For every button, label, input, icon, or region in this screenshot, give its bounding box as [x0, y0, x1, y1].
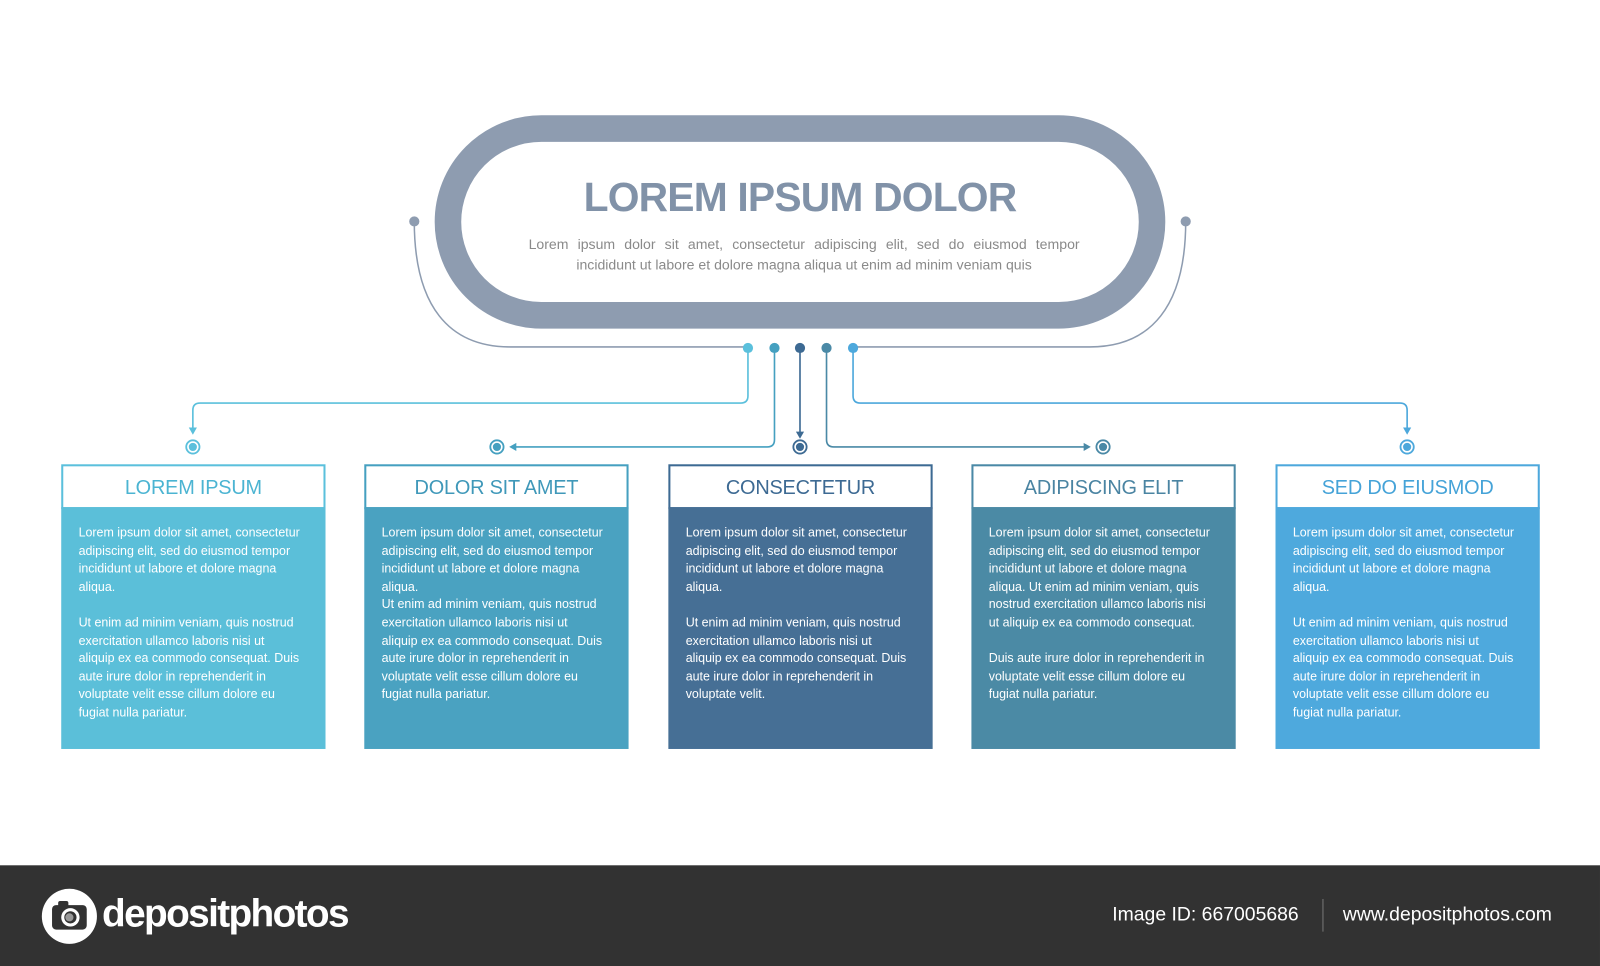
- card 2 body: [364, 507, 629, 749]
- card 5 body: Lorem ipsum dolor sit amet, consectetur: [1293, 526, 1514, 540]
- card 3 body: Ut enim ad minim veniam, quis nostrud: [686, 615, 901, 630]
- card 1 body: aliquip ex ea commodo consequat. Duis: [79, 651, 299, 665]
- card 4 heading: [971, 464, 1236, 509]
- card 3 body: aliquip ex ea commodo consequat. Duis: [686, 651, 906, 665]
- card 3 body: aute irure dolor in reprehenderit in: [686, 669, 873, 683]
- card 5 body: aliquip ex ea commodo consequat. Duis: [1293, 651, 1513, 665]
- subtitle: [529, 237, 1080, 272]
- card 2 heading: DOLOR SIT AMET: [415, 477, 578, 499]
- card 1 body: exercitation ullamco laboris nisi ut: [79, 633, 265, 648]
- card 4 body: fugiat nulla pariatur.: [989, 687, 1097, 701]
- connector 5: [848, 343, 1414, 454]
- card 4 body: ut aliquip ex ea commodo consequat.: [989, 615, 1195, 630]
- left side arc: [409, 216, 748, 347]
- title: LOREM IPSUM DOLOR: [584, 176, 1016, 220]
- card 2 body: fugiat nulla pariatur.: [382, 687, 490, 701]
- card 1 heading: LOREM IPSUM: [125, 477, 262, 499]
- card 1 body: aute irure dolor in reprehenderit in: [79, 669, 266, 683]
- card 3 body: adipiscing elit, sed do eiusmod tempor: [686, 543, 897, 558]
- card 3: [668, 464, 933, 749]
- card 3 body: voluptate velit.: [686, 687, 765, 701]
- card 3 heading: [668, 464, 933, 509]
- card 4 body: Lorem ipsum dolor sit amet, consectetur: [989, 526, 1210, 540]
- card 1 body: fugiat nulla pariatur.: [79, 705, 187, 719]
- card 4 body: incididunt ut labore et dolore magna: [989, 561, 1187, 576]
- footer bar: [0, 865, 1600, 966]
- diagram lines and pill: [185, 115, 1415, 454]
- card 5 body: voluptate velit esse cillum dolore eu: [1293, 687, 1489, 701]
- logo text: depositphotos: [102, 893, 348, 936]
- subtitle: Lorem ipsum dolor sit amet, consectetur adipiscing elit, sed do eiusmod tempor: [529, 237, 1080, 252]
- card 1 heading: [61, 464, 326, 509]
- card 5 heading: [1276, 464, 1540, 509]
- card 2 body: incididunt ut labore et dolore magna: [382, 561, 579, 576]
- card 3 body: [668, 507, 933, 749]
- card 2: [364, 464, 629, 749]
- card 5 body: adipiscing elit, sed do eiusmod tempor: [1293, 543, 1504, 558]
- subtitle: incididunt ut labore et dolore magna aliqua ut enim ad minim veniam quis: [576, 257, 1032, 272]
- footer logo: [42, 888, 348, 944]
- card 5 body: incididunt ut labore et dolore magna: [1293, 561, 1491, 576]
- card 4 body: adipiscing elit, sed do eiusmod tempor: [989, 543, 1200, 558]
- central pill: [448, 129, 1152, 315]
- icon: camera: [42, 888, 97, 944]
- card 3 body: aliqua.: [686, 579, 722, 594]
- card 4: [971, 464, 1236, 749]
- card 1: [61, 464, 326, 749]
- card 1 body: aliqua.: [79, 579, 115, 594]
- card 3 body: exercitation ullamco laboris nisi ut: [686, 633, 872, 648]
- card 2 body: adipiscing elit, sed do eiusmod tempor: [382, 543, 593, 558]
- connector 2: [490, 343, 780, 454]
- card 2 body: aute irure dolor in reprehenderit in: [382, 651, 569, 665]
- card 1 body: [61, 507, 326, 749]
- card 5 body: fugiat nulla pariatur.: [1293, 705, 1401, 719]
- connector 1: [186, 343, 753, 454]
- card 1 body: incididunt ut labore et dolore magna: [79, 561, 276, 576]
- card 3 body: Lorem ipsum dolor sit amet, consectetur: [686, 526, 907, 540]
- card 1 body: voluptate velit esse cillum dolore eu: [79, 687, 275, 701]
- card 5 heading: SED DO EIUSMOD: [1322, 477, 1494, 499]
- connector 3: [793, 343, 807, 454]
- card 4 heading: ADIPISCING ELIT: [1024, 477, 1183, 499]
- card 4 body: [971, 507, 1236, 749]
- right side arc: [853, 216, 1191, 347]
- card 3 body: incididunt ut labore et dolore magna: [686, 561, 883, 576]
- card 1 body: Ut enim ad minim veniam, quis nostrud: [79, 615, 294, 630]
- card 1 body: Lorem ipsum dolor sit amet, consectetur: [79, 526, 300, 540]
- footer image id: Image ID: 667005686: [1112, 904, 1299, 926]
- connector 4: [821, 343, 1110, 454]
- card 5 body: Ut enim ad minim veniam, quis nostrud: [1293, 615, 1508, 630]
- card 2 body: exercitation ullamco laboris nisi ut: [382, 615, 568, 630]
- card 5 body: aute irure dolor in reprehenderit in: [1293, 669, 1480, 683]
- card 4 body: voluptate velit esse cillum dolore eu: [989, 669, 1185, 683]
- card 2 body: aliqua.: [382, 579, 418, 594]
- card 4 body: nostrud exercitation ullamco laboris nisi: [989, 597, 1206, 612]
- card 5: [1276, 464, 1540, 749]
- card 4 body: Duis aute irure dolor in reprehenderit in: [989, 651, 1204, 665]
- card 1 body: adipiscing elit, sed do eiusmod tempor: [79, 543, 290, 558]
- card 2 body: Lorem ipsum dolor sit amet, consectetur: [382, 526, 603, 540]
- card 5 body: aliqua.: [1293, 579, 1330, 594]
- card 4 body: aliqua. Ut enim ad minim veniam, quis: [989, 579, 1199, 594]
- card 5 body: exercitation ullamco laboris nisi ut: [1293, 633, 1479, 648]
- card 2 body: voluptate velit esse cillum dolore eu: [382, 669, 578, 683]
- card 2 body: Ut enim ad minim veniam, quis nostrud: [382, 597, 597, 612]
- card 3 heading: CONSECTETUR: [726, 477, 875, 499]
- card 5 body: [1276, 507, 1540, 749]
- card 2 body: aliquip ex ea commodo consequat. Duis: [382, 633, 602, 648]
- card 2 heading: [364, 464, 629, 509]
- footer url: www.depositphotos.com: [1343, 904, 1552, 926]
